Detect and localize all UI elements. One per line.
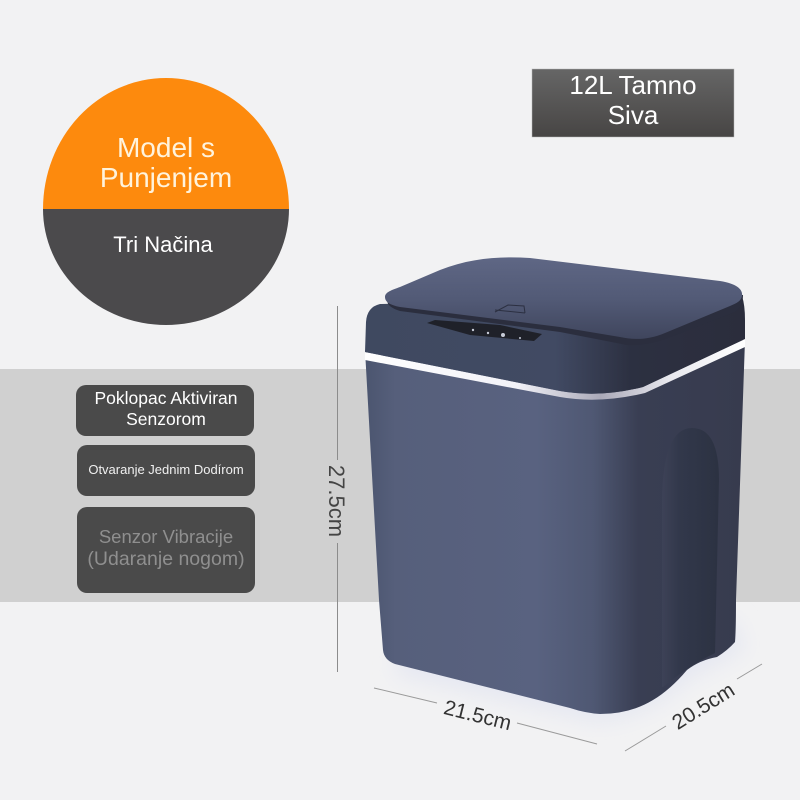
depth dimension [625, 664, 762, 751]
feature: sensor lid [76, 385, 254, 436]
feature: vibration sensor: (Udaranje nogom) [87, 548, 245, 570]
feature: vibration sensor [77, 507, 255, 593]
product: dark grey sensor bin [365, 257, 745, 714]
recessed handle [662, 428, 719, 687]
orange half [43, 78, 289, 209]
bin floor shadow [395, 620, 745, 722]
capacity tag: Siva [608, 100, 659, 130]
lid logo [495, 305, 525, 313]
rim [365, 296, 745, 394]
feature: one touch [77, 445, 255, 496]
white trim strip [365, 339, 745, 400]
capacity tag [532, 69, 734, 137]
feature: sensor lid: Senzorom [126, 409, 206, 429]
width dimension: 21.5cm [441, 696, 514, 735]
feature: sensor lid: Poklopac Aktiviran [94, 388, 238, 408]
height dimension: 27.5cm [324, 465, 349, 537]
depth dimension: 20.5cm [668, 678, 739, 734]
lid dark side [387, 295, 743, 345]
feature: vibration sensor: Senzor Vibracije [99, 526, 233, 547]
bin body [365, 340, 745, 714]
dark half [43, 209, 289, 325]
background grey band [0, 369, 800, 602]
badge circle: Punjenjem [100, 162, 232, 193]
control panel [427, 320, 542, 341]
badge title: Model s [117, 132, 215, 163]
capacity tag: 12L Tamno [569, 70, 697, 100]
lid [385, 257, 742, 339]
badge subtitle: Tri Načina [113, 232, 213, 257]
control panel buttons [472, 329, 521, 339]
badge circle [43, 78, 289, 325]
feature: one touch: Otvaranje Jednim Dodírom [88, 462, 244, 477]
width dimension [374, 688, 597, 744]
